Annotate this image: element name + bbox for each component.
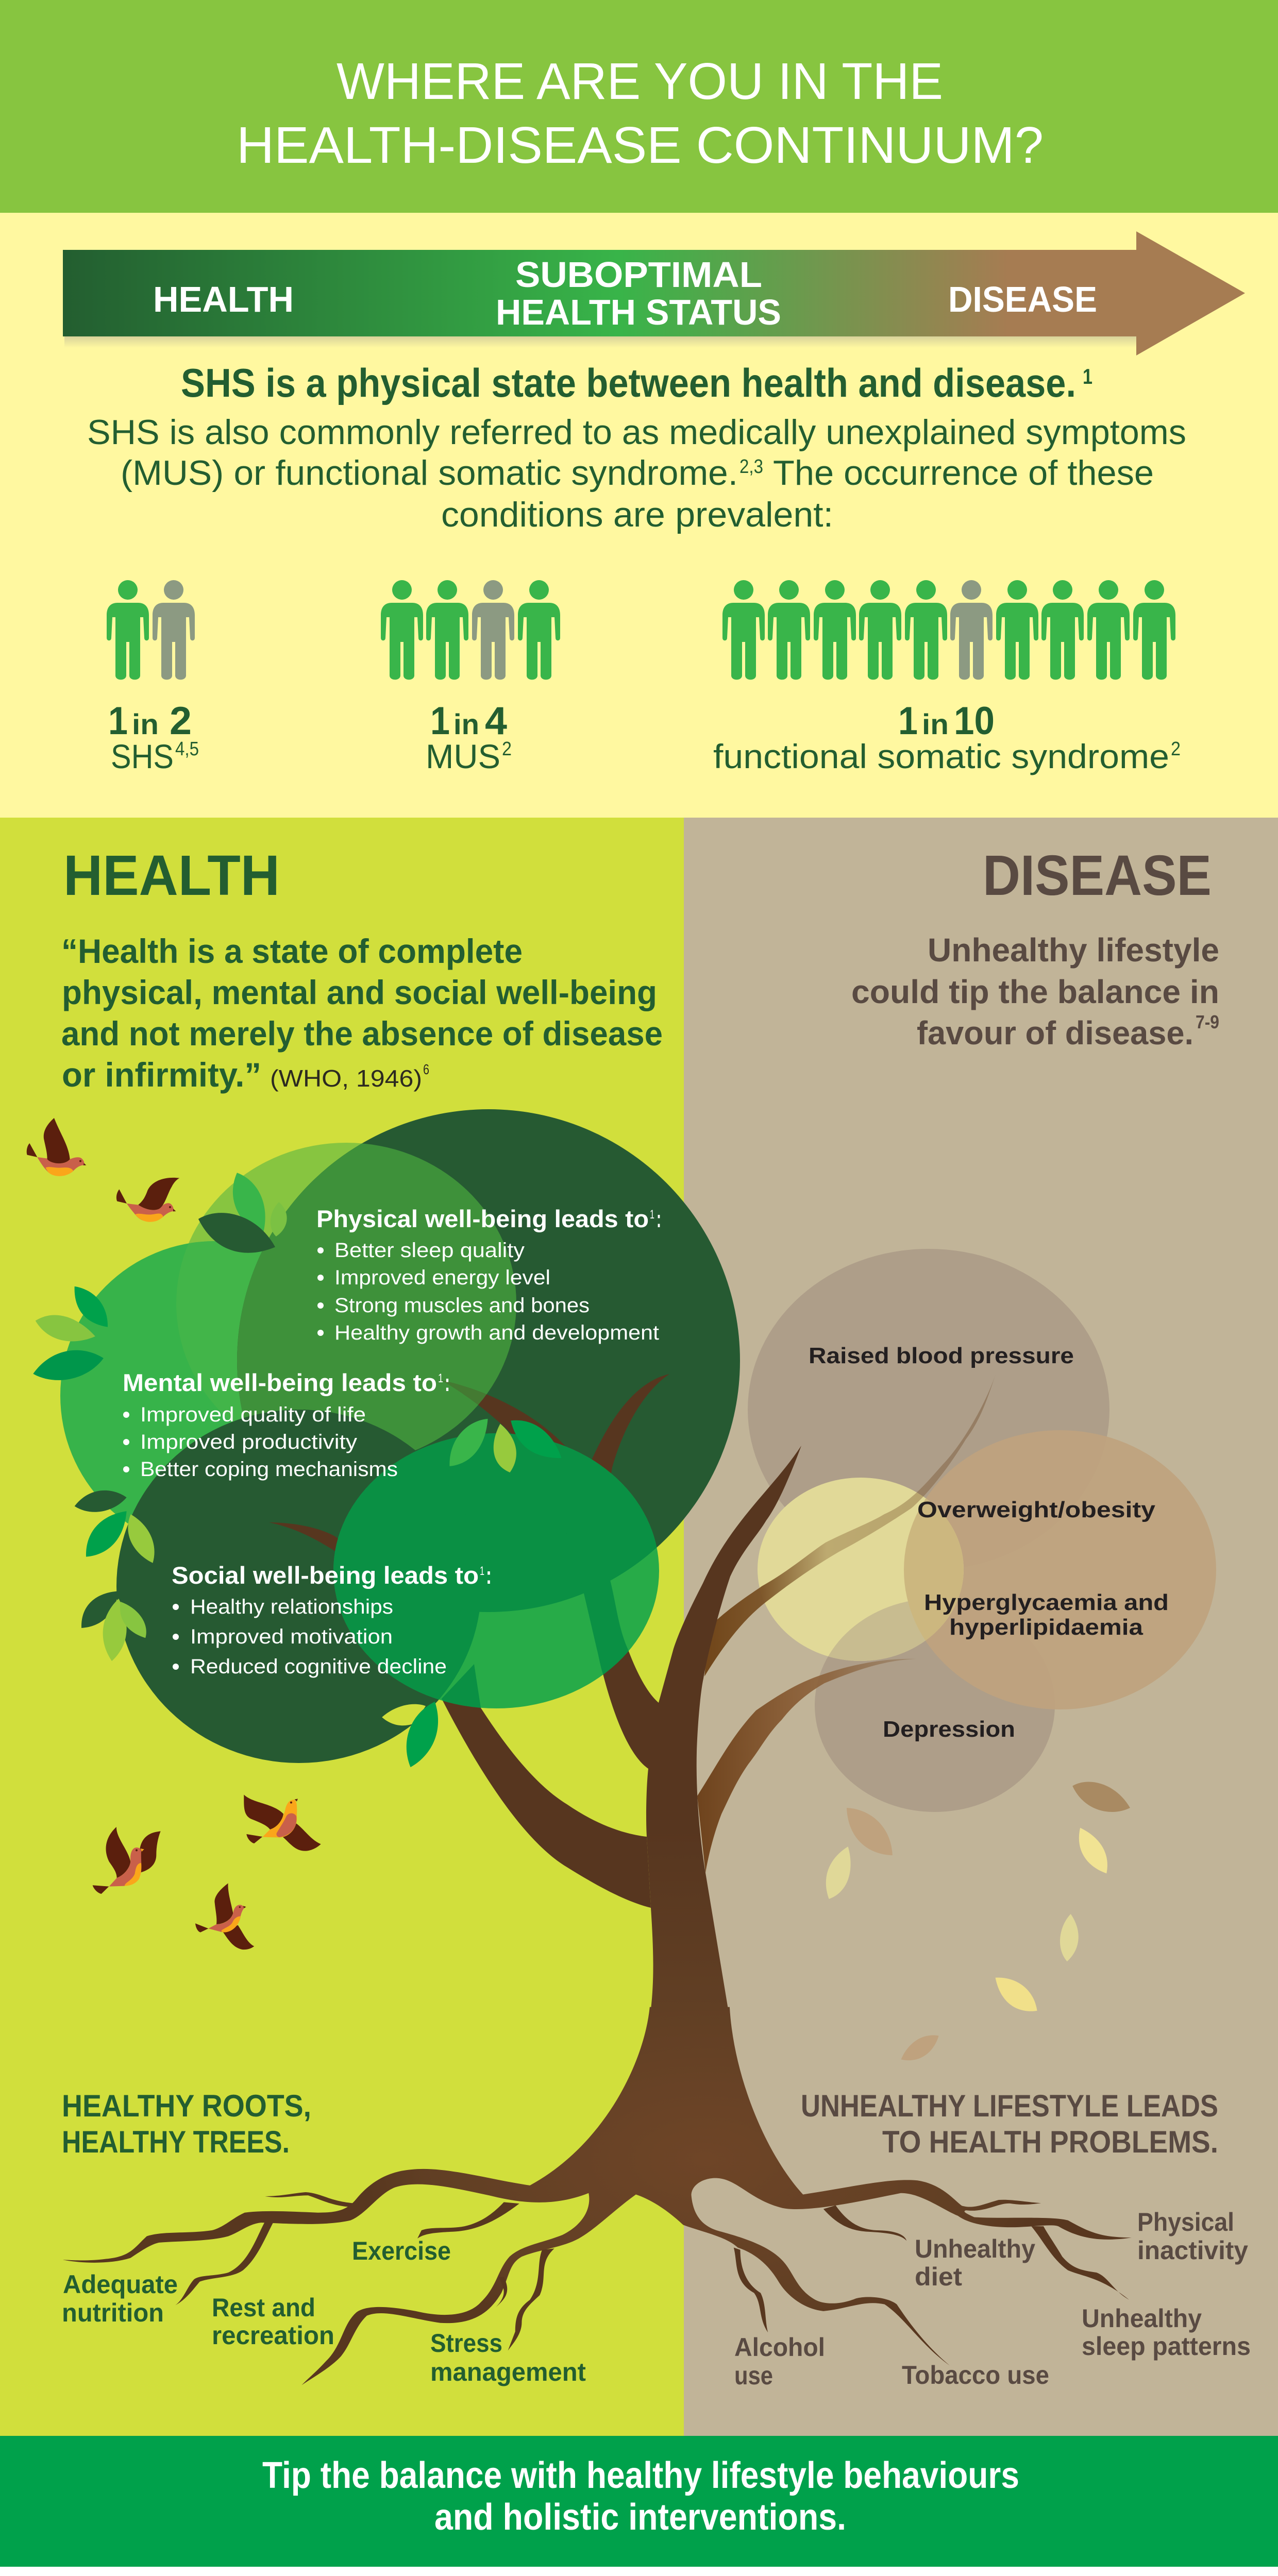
stat: 1 in 2 SHS	[108, 699, 199, 775]
root labels: unhealthy: inactivity	[1137, 2236, 1248, 2265]
icon: bird 5	[195, 1883, 254, 1950]
text block: social well-being: Improved motivation	[190, 1625, 393, 1648]
text block: disease conditions: hyperlipidaemia	[949, 1615, 1144, 1640]
text block: SHS description	[87, 413, 1186, 534]
text block: unhealthy lifestyle statement: could tip the balance in	[851, 973, 1219, 1010]
arrow label: suboptimal health status	[496, 255, 781, 332]
root labels: unhealthy: sleep patterns	[1082, 2332, 1251, 2361]
root labels: unhealthy: Alcohol	[734, 2333, 825, 2362]
heading: health: HEALTH	[63, 844, 280, 907]
tree overlay: branch seen through light circle	[442, 1380, 486, 1405]
text block: social well-being	[172, 1562, 492, 1678]
tree: wind-blown disease branches	[697, 1374, 996, 1873]
root labels: healthy: Stress	[430, 2329, 502, 2358]
text block: physical well-being: Physical well-being leads to	[316, 1205, 649, 1232]
circle: bright green overlay	[333, 1433, 659, 1708]
stat: 1 in 10 functional somatic syndrome: 2	[1171, 738, 1181, 760]
circle overlap: light and mental	[176, 1241, 262, 1422]
stat: 1 in 2 SHS: SHS	[111, 737, 174, 775]
call to action text: and holistic interventions.	[434, 2497, 846, 2538]
text block: mental well-being: Mental well-being leads to	[123, 1369, 437, 1396]
stat: 1 in 2 SHS: 1	[108, 699, 128, 743]
icon: bird 2	[116, 1178, 179, 1222]
circle: depression	[815, 1599, 1055, 1812]
root labels: healthy: Exercise	[352, 2236, 451, 2265]
title	[237, 53, 1044, 174]
icon: bird 1	[27, 1118, 86, 1176]
text block: disease conditions	[809, 1343, 1169, 1742]
text block: SHS description: SHS is also commonly referred to as medically unexplained symptoms	[87, 413, 1186, 452]
text block: physical well-being: Healthy growth and development	[334, 1321, 659, 1344]
root labels: healthy: management	[430, 2358, 586, 2386]
icon group: 1 in 2 people	[107, 580, 195, 680]
quote: WHO definition of health: or infirmity.”	[62, 1056, 261, 1094]
icon group: 1 in 4 people	[381, 580, 560, 680]
stat: 1 in 2 SHS: 4,5	[175, 738, 199, 760]
circle: overweight and hyperglycaemia	[904, 1430, 1216, 1709]
title: HEALTH-DISEASE CONTINUUM?	[237, 116, 1044, 174]
heading: SHS definition: 1	[1083, 364, 1092, 388]
text block: disease conditions: Overweight/obesity	[917, 1497, 1156, 1522]
leaves: falling autumn leaves	[826, 1782, 1130, 2060]
icon: bird 3	[93, 1827, 161, 1894]
text block: unhealthy lifestyle statement: 7-9	[1196, 1011, 1219, 1032]
stat: 1 in 2 SHS: 2	[170, 699, 192, 743]
leaves: green foliage	[33, 1173, 561, 1767]
tree: roots	[63, 2007, 1132, 2385]
stat: 1 in 10 functional somatic syndrome: functional somatic syndrome	[713, 737, 1169, 775]
root labels: unhealthy: Unhealthy	[1082, 2304, 1202, 2333]
arrow label: disease: DISEASE	[948, 279, 1097, 319]
text block: unhealthy lifestyle statement: Unhealthy lifestyle	[928, 931, 1219, 969]
root labels: unhealthy: Unhealthy	[915, 2234, 1035, 2263]
panel: footer notes	[0, 2567, 1278, 2576]
circle: mental well-being	[60, 1241, 369, 1550]
text block: SHS description: The occurrence of these	[773, 453, 1154, 493]
tree: lower left branch	[442, 1664, 651, 1908]
root labels: healthy: nutrition	[62, 2298, 164, 2327]
stat: 1 in 4 MUS: 1	[430, 699, 450, 743]
tree: crown branches and trunk	[269, 1374, 801, 2009]
stat: 1 in 4 MUS: MUS	[426, 737, 500, 775]
heading: unhealthy lifestyle: TO HEALTH PROBLEMS.	[882, 2125, 1218, 2159]
arrow label: health: HEALTH	[153, 279, 294, 319]
heading: unhealthy lifestyle	[801, 2089, 1218, 2159]
text block: physical well-being: Improved energy level	[334, 1266, 550, 1289]
text block: physical well-being: Better sleep quality	[334, 1239, 525, 1262]
circle: pale yellow	[758, 1478, 964, 1661]
call to action text: Tip the balance with healthy lifestyle behaviours	[262, 2455, 1019, 2496]
text block: mental well-being: Improved productivity	[140, 1431, 357, 1453]
panel: call to action band	[0, 2436, 1278, 2567]
call to action text	[262, 2455, 1019, 2538]
heading: healthy roots: HEALTHY TREES.	[62, 2125, 290, 2159]
arrow label: suboptimal health status: SUBOPTIMAL	[515, 255, 762, 295]
stat: 1 in 4 MUS: 2	[502, 738, 512, 760]
circle: raised blood pressure	[748, 1249, 1109, 1570]
text block: mental well-being: Improved quality of life	[140, 1403, 366, 1426]
text block: unhealthy lifestyle statement: favour of disease.	[917, 1014, 1193, 1052]
root labels: unhealthy: diet	[915, 2262, 962, 2291]
root labels: healthy: Adequate	[63, 2270, 178, 2299]
circle: social well-being	[116, 1410, 481, 1763]
root labels: healthy: recreation	[212, 2321, 334, 2350]
text block: SHS description: 2,3	[739, 456, 763, 478]
quote: WHO definition of health: physical, mental and social well-being	[62, 973, 657, 1011]
text block: social well-being: Reduced cognitive decline	[190, 1655, 447, 1678]
text block: physical well-being: Strong muscles and bones	[334, 1294, 590, 1317]
title: WHERE ARE YOU IN THE	[337, 53, 943, 110]
text block: SHS description: (MUS) or functional somatic syndrome.	[121, 453, 738, 493]
icon group: 1 in 10 people	[722, 580, 1175, 680]
quote: WHO definition of health: 6	[423, 1061, 429, 1077]
text block: physical well-being: 1	[650, 1208, 654, 1222]
icon: bird 4	[244, 1794, 321, 1851]
arrow label: suboptimal health status: HEALTH STATUS	[496, 292, 781, 332]
text block: social well-being: Social well-being leads to	[172, 1562, 479, 1589]
heading: unhealthy lifestyle: UNHEALTHY LIFESTYLE LEADS	[801, 2089, 1218, 2123]
stat: 1 in 10 functional somatic syndrome	[713, 699, 1181, 775]
quote: WHO definition of health: (WHO, 1946)	[270, 1065, 422, 1092]
text block: unhealthy lifestyle statement	[851, 931, 1219, 1052]
heading: SHS definition: SHS is a physical state between health and disease.	[181, 360, 1076, 405]
quote: WHO definition of health: and not merely the absence of disease	[61, 1014, 663, 1053]
text block: disease conditions: Raised blood pressure	[809, 1343, 1074, 1368]
heading: healthy roots	[62, 2089, 311, 2159]
text block: mental well-being: :	[445, 1369, 450, 1396]
stat: 1 in 2 SHS: in	[132, 708, 159, 740]
quote: WHO definition of health	[61, 932, 663, 1094]
quote: WHO definition of health: “Health is a state of complete	[61, 932, 523, 970]
root labels: unhealthy: use	[734, 2361, 773, 2390]
stat: 1 in 10 functional somatic syndrome: in	[922, 708, 949, 740]
text block: physical well-being	[316, 1205, 661, 1344]
text block: SHS description: conditions are prevalent:	[441, 495, 833, 534]
arrow: health to disease continuum	[63, 231, 1245, 355]
root labels: unhealthy: Tobacco use	[902, 2361, 1049, 2389]
root labels: healthy	[62, 2236, 586, 2386]
text block: mental well-being: 1	[438, 1371, 443, 1385]
stat: 1 in 10 functional somatic syndrome: 1	[898, 699, 918, 743]
text block: social well-being: 1	[480, 1564, 484, 1578]
stat: 1 in 4 MUS	[426, 699, 512, 775]
text block: mental well-being	[123, 1369, 450, 1481]
circle overlap: physical and light	[237, 1144, 516, 1450]
circle: light green	[176, 1143, 516, 1464]
stat: 1 in 4 MUS: in	[453, 708, 479, 740]
text block: disease conditions: Hyperglycaemia and	[924, 1590, 1169, 1615]
root labels: healthy: Rest and	[212, 2293, 315, 2322]
text block: mental well-being: Better coping mechanisms	[140, 1458, 398, 1481]
health circles	[60, 1109, 740, 1548]
stat: 1 in 4 MUS: 4	[485, 699, 507, 743]
panel: title band	[0, 0, 1278, 213]
heading: disease: DISEASE	[983, 844, 1212, 907]
circle: physical well-being	[237, 1109, 740, 1612]
root labels: unhealthy: Physical	[1137, 2208, 1234, 2236]
text block: disease conditions: Depression	[883, 1717, 1015, 1742]
disease circles	[748, 1249, 1216, 1812]
text block: physical well-being: :	[657, 1205, 661, 1232]
heading: healthy roots: HEALTHY ROOTS,	[62, 2089, 311, 2123]
text block: social well-being: :	[486, 1562, 492, 1589]
stat: 1 in 10 functional somatic syndrome: 10	[954, 699, 995, 743]
text block: social well-being: Healthy relationships	[190, 1596, 393, 1618]
root labels: unhealthy	[734, 2208, 1251, 2390]
